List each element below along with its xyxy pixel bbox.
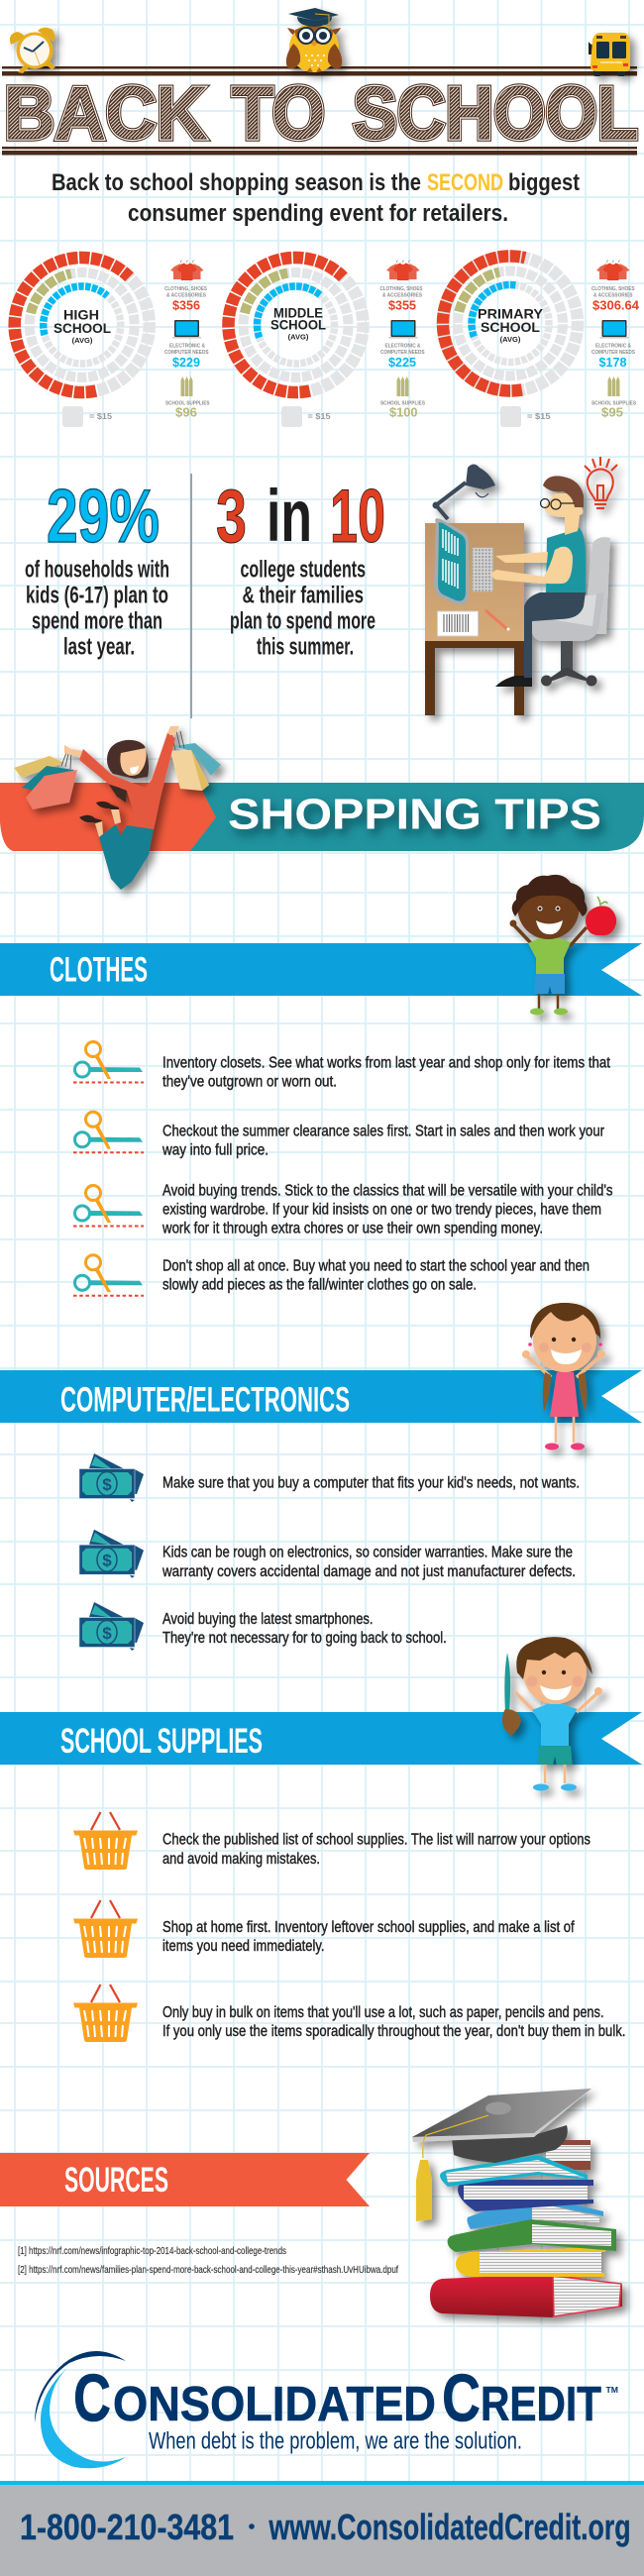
stat: 3 in 10: college students [240, 557, 366, 584]
legend [281, 406, 331, 427]
clothing figure: & ACCESSORIES [593, 293, 633, 299]
illustration: boy with apple [509, 875, 616, 1015]
tip 1: they've outgrown or worn out. [162, 1074, 337, 1091]
supplies figure: $100 [389, 405, 418, 420]
desk [425, 523, 524, 715]
electronics figure: ELECTRONIC & [595, 344, 631, 350]
icon: alarm clock [10, 28, 55, 73]
electronics figure: $178 [598, 355, 626, 370]
supplies figure [380, 401, 425, 420]
heading: school supplies: SCHOOL SUPPLIES [60, 1722, 263, 1761]
clothing figure: & ACCESSORIES [382, 293, 422, 299]
electronics figure [380, 344, 425, 370]
tip 2 [79, 1530, 576, 1580]
light bulb [585, 457, 617, 508]
yellow book [456, 2247, 605, 2277]
clothing figure: $306.64 [592, 298, 640, 313]
legend [500, 406, 551, 427]
phone number: 1-800-210-3481 [20, 2507, 234, 2547]
logo wordmark: C [442, 2360, 481, 2435]
tip 2: warranty covers accidental damage and not just manufacturer defects. [161, 1563, 576, 1580]
chair [531, 537, 610, 686]
donut label: MIDDLE [273, 305, 323, 321]
supplies figure: SCHOOL SUPPLIES [591, 401, 636, 407]
tip 2 [73, 1900, 575, 1958]
title: BACK TO SCHOOL [4, 71, 638, 155]
legend: = $15 [89, 411, 112, 421]
tip 3 [79, 1602, 447, 1651]
heading: computer electronics: COMPUTER/ELECTRONICS [60, 1380, 350, 1419]
icon: laptop [388, 320, 418, 339]
logo swoosh [35, 2351, 126, 2468]
tip 1 [73, 1042, 610, 1091]
stat: 3 in 10 [216, 475, 385, 661]
tip 3: They're not necessary for to going back to school. [162, 1630, 447, 1647]
stat: 29 percent [25, 475, 169, 661]
tip 1 [73, 1812, 590, 1870]
source list: [1] https://nrf.com/news/infographic-top-2014-back-school-and-college-trends [18, 2245, 286, 2257]
legend: = $15 [307, 411, 331, 421]
electronics figure [164, 344, 209, 370]
panel: middle school spending [216, 245, 425, 427]
illustration: girl [522, 1303, 605, 1450]
lamp [432, 464, 495, 519]
shoe and trousers [495, 592, 586, 687]
intro text [52, 169, 580, 227]
icon: laptop [172, 320, 201, 339]
stat: 29 percent: kids (6-17) plan to [26, 583, 168, 609]
supplies figure [165, 401, 210, 420]
donut label: (AVG) [72, 336, 93, 345]
intro text: consumer spending event for retailers. [128, 200, 508, 227]
electronics figure: ELECTRONIC & [384, 344, 421, 350]
icon: pencils [608, 376, 620, 396]
ribbon: sources [0, 2153, 370, 2206]
banner: shopping tips [0, 783, 644, 851]
legend [62, 406, 112, 427]
icon: owl with graduation cap [286, 8, 342, 72]
tip 3 [73, 1183, 612, 1236]
panel: primary school spending [430, 244, 640, 427]
icon: t-shirts [596, 261, 630, 280]
icon: t-shirts [170, 261, 204, 280]
icon: pencils [180, 376, 192, 396]
donut label: SCHOOL [54, 320, 111, 336]
navy book [458, 2180, 593, 2211]
legend: = $15 [527, 411, 551, 421]
donut label: SCHOOL [270, 317, 326, 333]
stat: 29 percent: last year. [63, 634, 135, 661]
source list: [2] https://nrf.com/news/families-plan-spend-more-back-school-and-college-this-year#sthash.UvHUibwa.dpuf [18, 2264, 398, 2276]
clothing figure: CLOTHING, SHOES [380, 286, 423, 292]
donut label [270, 305, 326, 342]
tip 2: items you need immediately. [162, 1938, 325, 1955]
clothing figure [164, 286, 207, 313]
graduation cap [412, 2089, 591, 2221]
donut chart: middle school [216, 245, 376, 405]
icon: t-shirts [386, 261, 420, 280]
paper and pencil [438, 610, 509, 636]
donut label: HIGH [63, 307, 99, 323]
keyboard [473, 548, 493, 591]
woman [64, 726, 179, 890]
ribbon: school supplies [0, 1712, 642, 1765]
logo wordmark [73, 2360, 618, 2435]
intro text: Back to school shopping season is the [52, 169, 421, 196]
tips: clothes [73, 1042, 612, 1296]
bags left [14, 749, 77, 809]
tips: school supplies [73, 1812, 625, 2042]
electronics figure: $225 [388, 355, 416, 370]
tip 3: work for it through extra chores or use their own spending money. [161, 1220, 543, 1236]
stat: 3 in 10: plan to spend more [230, 608, 376, 635]
electronics figure: $229 [172, 355, 200, 370]
supplies figure: SCHOOL SUPPLIES [380, 401, 425, 407]
stat: 3 in 10: this summer. [257, 634, 354, 661]
tip 1 [79, 1453, 580, 1502]
stat: 3 in 10: & their families [242, 583, 364, 609]
stat: 29 percent: spend more than [32, 608, 162, 635]
illustration: woman with shopping bags [14, 726, 221, 890]
red book [430, 2274, 622, 2317]
donut chart: primary school [430, 244, 590, 403]
supplies figure: $96 [175, 405, 197, 420]
brown book [546, 2140, 590, 2170]
header rule top [2, 66, 637, 75]
tip 4 [73, 1255, 590, 1296]
heading: shopping tips: SHOPPING TIPS [228, 791, 601, 839]
clothing figure [591, 286, 640, 313]
electronics figure: COMPUTER NEEDS [380, 350, 425, 356]
ribbon: computer electronics [0, 1370, 642, 1423]
header rule bottom [2, 147, 637, 155]
donut chart: high school [2, 245, 161, 405]
supplies figure [591, 401, 636, 420]
ribbon: clothes [0, 943, 642, 996]
green book [448, 2219, 616, 2252]
donut label: (AVG) [288, 333, 309, 342]
tip 2 [73, 1112, 605, 1159]
head [541, 476, 584, 535]
clothing figure: & ACCESSORIES [166, 293, 206, 299]
clothing figure: $355 [388, 297, 416, 313]
supplies figure: SCHOOL SUPPLIES [165, 401, 210, 407]
logo wordmark: REDIT [481, 2378, 601, 2431]
footer contact bar [0, 2481, 644, 2576]
clothing figure [380, 286, 423, 313]
electronics figure: COMPUTER NEEDS [164, 350, 209, 356]
monitor [434, 518, 469, 605]
clothing figure: CLOTHING, SHOES [164, 286, 207, 292]
electronics figure: ELECTRONIC & [169, 344, 205, 350]
donut label: PRIMARY [478, 306, 544, 322]
tip 1: and avoid making mistakes. [162, 1851, 320, 1868]
stat: 29 percent: of households with [25, 557, 169, 584]
stat: 3 in 10: 3 [216, 475, 247, 559]
logo wordmark: TM [606, 2386, 618, 2395]
icon: laptop [600, 320, 628, 339]
electronics figure [591, 344, 635, 370]
tip 2: way into full price. [161, 1142, 268, 1159]
supplies figure: $95 [601, 405, 623, 420]
donut label: (AVG) [500, 335, 521, 344]
stat: 3 in 10: in [267, 475, 312, 557]
logo wordmark: C [73, 2360, 111, 2435]
tip 3 [73, 1985, 625, 2042]
donut label [54, 307, 111, 345]
bags right [170, 731, 221, 791]
illustration: student at desk [425, 457, 617, 715]
source list [18, 2245, 398, 2276]
torso and arms [489, 528, 586, 592]
icon: pencils [396, 376, 408, 396]
illustration: boy with paintbrush [502, 1637, 602, 1791]
tips: computer electronics [79, 1453, 580, 1651]
heading: clothes: CLOTHES [50, 951, 148, 990]
electronics figure: COMPUTER NEEDS [591, 350, 635, 356]
intro text: SECOND [427, 169, 503, 196]
tip 3: Avoid buying the latest smartphones. [162, 1611, 373, 1628]
logo tagline: When debt is the problem, we are the solution. [149, 2428, 522, 2455]
donut label [478, 306, 544, 344]
separator dot [249, 2523, 255, 2529]
intro text: biggest [508, 169, 580, 196]
panel: high school spending [2, 245, 210, 427]
logo wordmark: ONSOLIDATED [113, 2378, 436, 2431]
illustration: stack of books with graduation cap [412, 2089, 622, 2317]
clothing figure: CLOTHING, SHOES [591, 286, 635, 292]
heading: sources: SOURCES [64, 2161, 168, 2200]
teal book [440, 2155, 588, 2187]
stat: 29 percent: 29% [47, 475, 160, 559]
donut label: SCHOOL [481, 319, 540, 335]
icon: school bus [589, 33, 630, 76]
logo: Consolidated Credit [35, 2351, 618, 2468]
tip 4: slowly add pieces as the fall/winter clothes go on sale. [162, 1277, 477, 1294]
clothing figure: $356 [172, 297, 200, 313]
stat: 3 in 10: 10 [330, 475, 385, 559]
light blue book [467, 2195, 603, 2229]
